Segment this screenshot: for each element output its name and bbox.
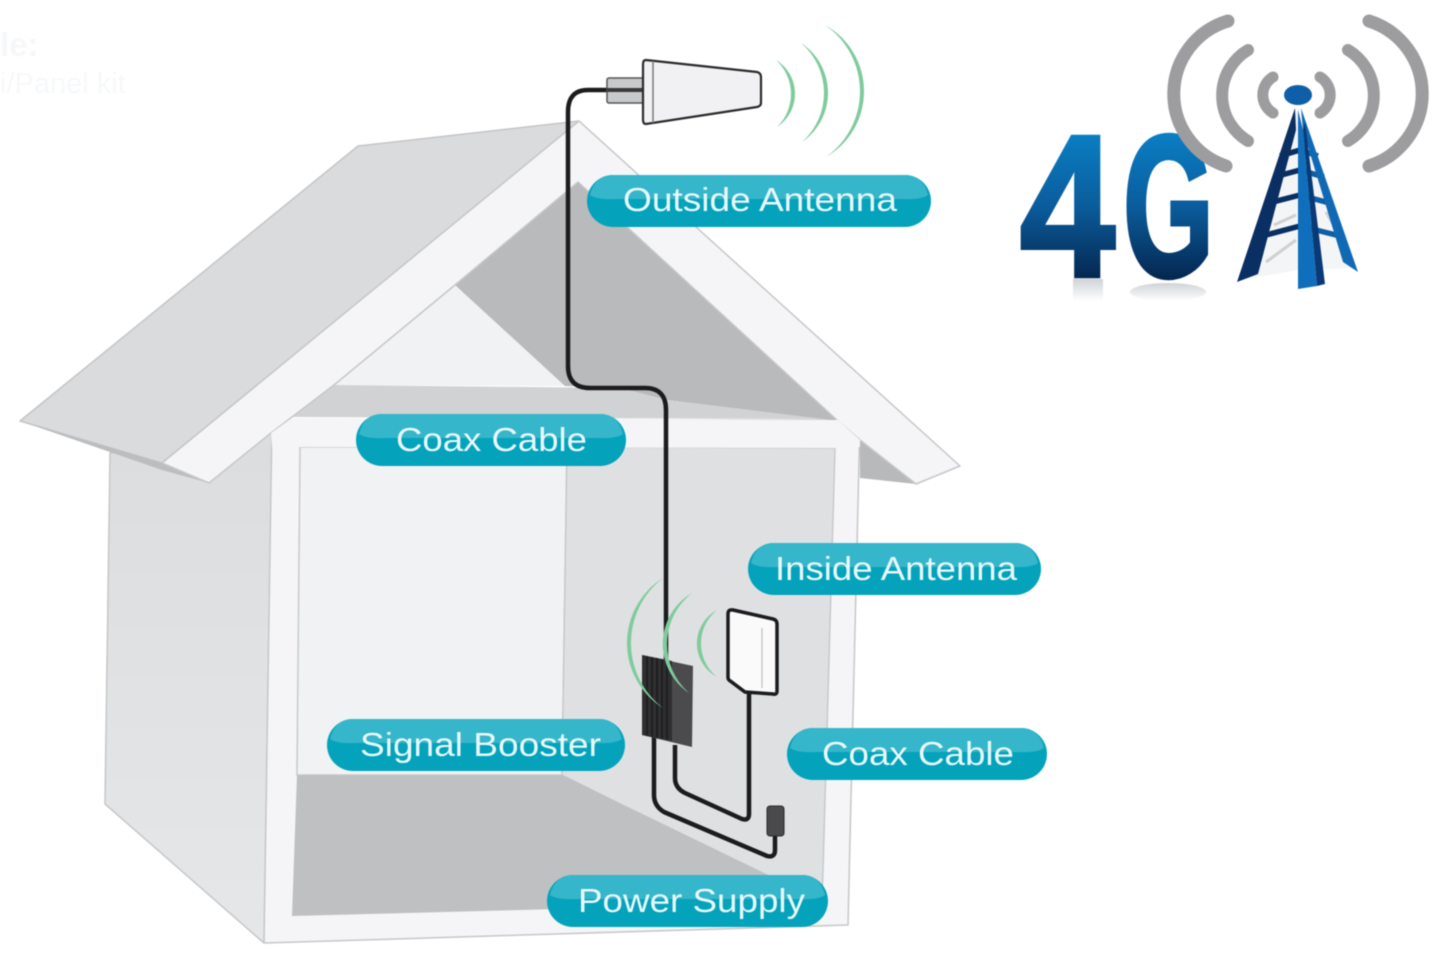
coax cable: outside antenna to booster bbox=[568, 90, 666, 665]
attic floor bbox=[292, 385, 838, 421]
4G tower logo bbox=[1020, 21, 1422, 319]
antenna body bbox=[643, 60, 761, 124]
faint background heading bbox=[0, 26, 126, 100]
interior right back wall bbox=[562, 447, 835, 905]
label: Coax Cable (attic) bbox=[356, 414, 626, 466]
right leg bbox=[1301, 108, 1358, 272]
left roof underside edge bbox=[20, 421, 209, 483]
label: Coax Cable (indoor) bbox=[787, 728, 1047, 780]
label: Power Supply bbox=[547, 875, 828, 927]
tower bbox=[1237, 108, 1358, 289]
icon: inside antenna signal waves bbox=[627, 578, 717, 708]
icon: inside antenna bbox=[728, 610, 777, 694]
left face rungs bbox=[1255, 150, 1300, 238]
icon: outside antenna signal waves bbox=[776, 25, 864, 157]
frame crossbar bbox=[271, 418, 860, 448]
logo reflection bbox=[1073, 279, 1206, 301]
icon: signal booster bbox=[642, 655, 693, 747]
left leg bbox=[1237, 108, 1296, 282]
left side wall bbox=[105, 433, 272, 943]
attic back wall light bbox=[334, 285, 565, 386]
centre leg bbox=[1298, 110, 1317, 289]
roof fascia bbox=[162, 121, 960, 484]
front wall frame bbox=[264, 420, 860, 943]
4G wordmark bbox=[1020, 93, 1214, 319]
icon: outside antenna bbox=[607, 60, 761, 124]
icon: power supply bbox=[767, 806, 784, 836]
label: Inside Antenna: Inside Antenna bbox=[775, 550, 1018, 587]
right eave shadow bbox=[860, 440, 916, 484]
interior left back wall bbox=[297, 447, 567, 775]
4G wordmark: 4 bbox=[1020, 93, 1115, 319]
faint background heading: le: bbox=[0, 26, 39, 63]
antenna connector bbox=[607, 78, 644, 103]
4G wordmark: G bbox=[1123, 93, 1214, 319]
signal arcs bbox=[1174, 21, 1422, 166]
faint background heading: i/Panel kit bbox=[0, 68, 126, 100]
cables below booster bbox=[654, 690, 775, 856]
right face rungs bbox=[1300, 150, 1344, 237]
label: Coax Cable (indoor): Coax Cable bbox=[822, 735, 1014, 772]
label: Inside Antenna bbox=[748, 543, 1041, 595]
house illustration bbox=[20, 121, 960, 943]
label: Power Supply: Power Supply bbox=[578, 882, 806, 919]
tower beacon bbox=[1284, 85, 1312, 105]
label: Outside Antenna bbox=[587, 175, 931, 227]
label: Signal Booster bbox=[327, 719, 625, 771]
attic back wall dark bbox=[455, 182, 838, 421]
label: Coax Cable (attic): Coax Cable bbox=[396, 421, 587, 458]
label: Signal Booster: Signal Booster bbox=[360, 726, 601, 763]
label: Outside Antenna: Outside Antenna bbox=[623, 181, 898, 218]
left roof surface bbox=[20, 121, 579, 463]
interior floor bbox=[292, 775, 824, 916]
